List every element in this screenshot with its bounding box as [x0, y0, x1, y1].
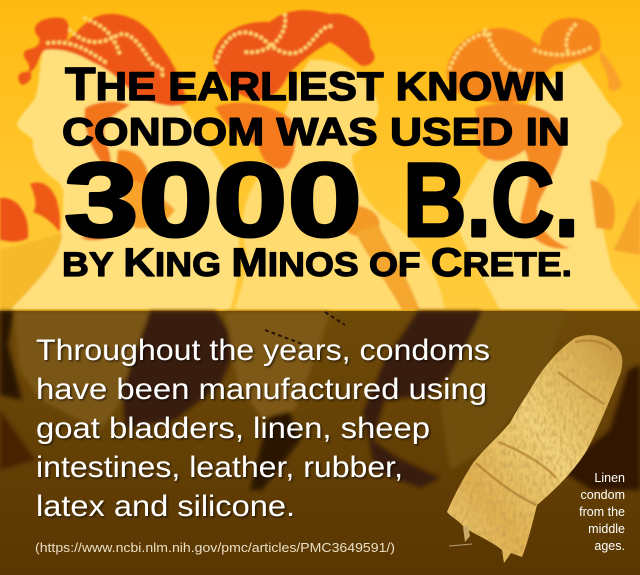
image caption: ages.: [594, 539, 625, 553]
title date: [64, 142, 579, 259]
body text: Throughout the years, condoms: [36, 334, 490, 367]
figure: centre woman: [118, 10, 445, 310]
title: [62, 58, 579, 285]
image caption: middle: [588, 522, 625, 536]
image caption: Linen: [594, 471, 625, 485]
body text: intestines, leather, rubber,: [36, 451, 403, 484]
source citation: (https://www.ncbi.nlm.nih.gov/pmc/articles/PMC3649591/): [35, 540, 395, 555]
illustration: linen condom: [447, 335, 622, 563]
panel: fresco background: [0, 0, 640, 311]
image caption: from the: [579, 505, 625, 519]
title line 1: THE EARLIEST KNOWN: [65, 58, 565, 110]
body text: latex and silicone.: [36, 490, 295, 523]
image caption: [579, 471, 625, 553]
title date: 3000: [64, 142, 362, 259]
body text: goat bladders, linen, sheep: [36, 412, 430, 445]
figure: right woman: [447, 18, 640, 310]
body text: [36, 334, 490, 523]
panel: dark lower band: [0, 310, 640, 575]
title date: B.C.: [403, 142, 579, 259]
image caption: condom: [581, 488, 625, 502]
body text: have been manufactured using: [36, 373, 487, 406]
title line 2: CONDOM WAS USED IN: [62, 111, 570, 154]
title line 4: BY KING MINOS OF CRETE.: [62, 241, 572, 285]
figure: left woman: [0, 14, 239, 310]
